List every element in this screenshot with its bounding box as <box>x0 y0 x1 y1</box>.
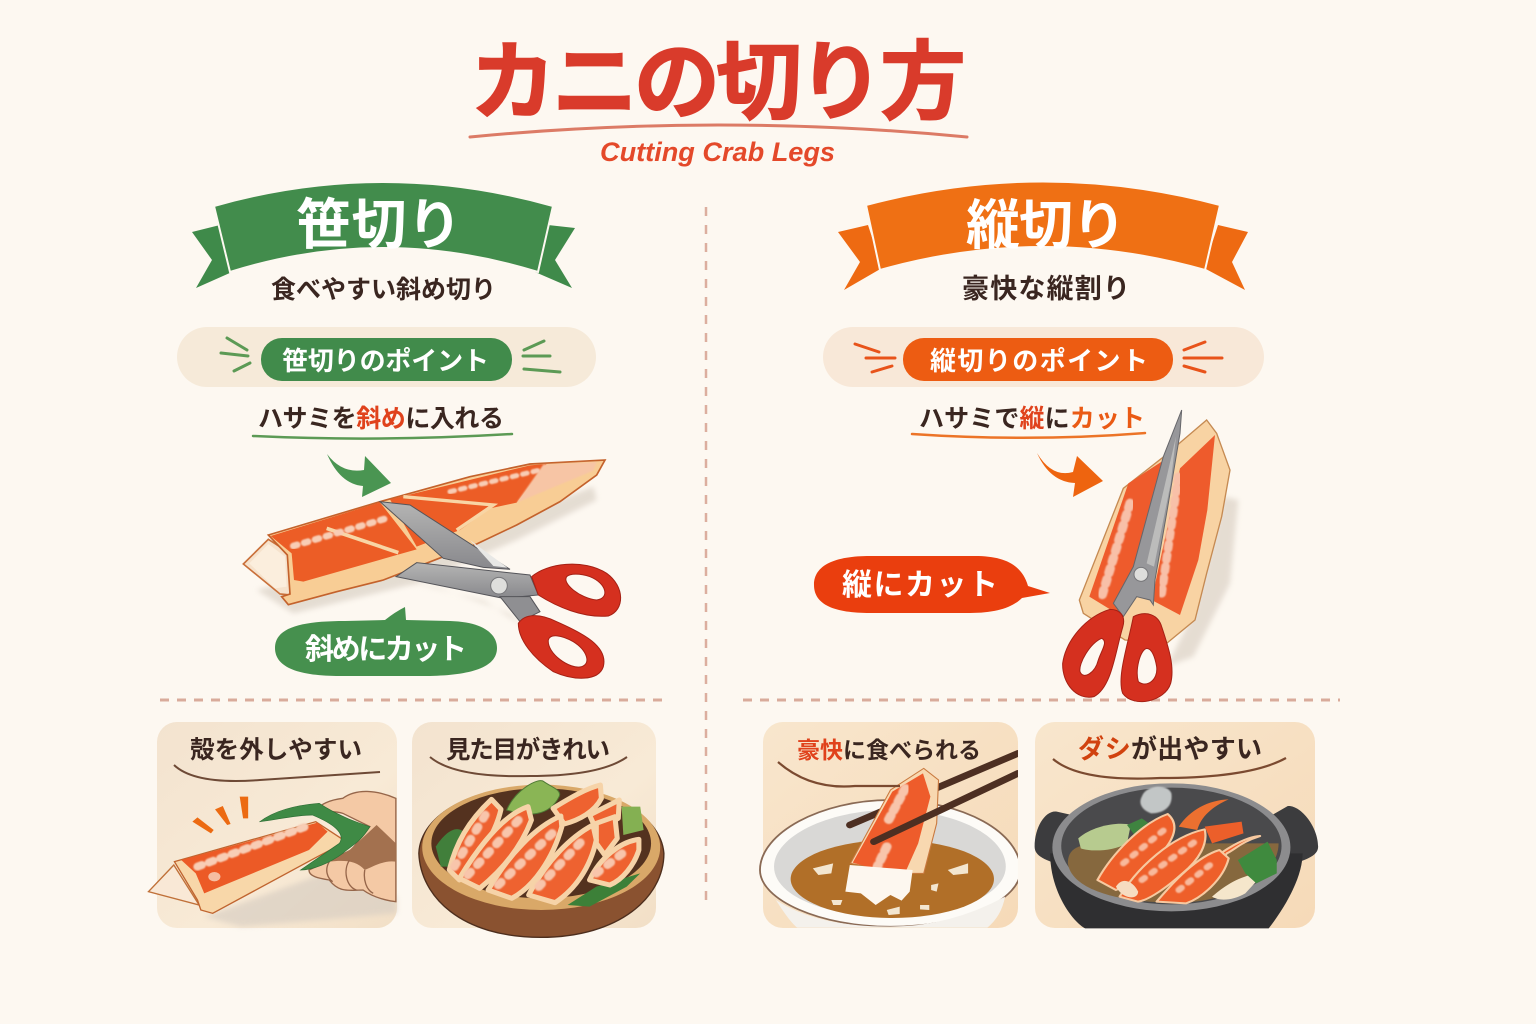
card: beautiful looks <box>412 722 664 937</box>
points pill: tate-giri <box>823 327 1264 387</box>
illustration: vertical cut crab leg with scissors <box>1063 410 1238 702</box>
card heading: 豪快に食べられる <box>797 737 981 763</box>
instruction: vertical cut: ハサミで縦にカット <box>919 405 1145 433</box>
callout: vertical cut <box>814 556 1050 613</box>
card: eat heartily <box>760 722 1021 928</box>
card: dashi comes out <box>1035 722 1318 930</box>
banner: tate-giri: 縦切り <box>966 196 1126 256</box>
arrow: green <box>327 454 391 497</box>
illustration: diagonal cut crab leg with scissors <box>243 460 621 678</box>
card heading: ダシが出やすい <box>1078 734 1262 764</box>
illustration: cracking shell by hand <box>148 791 397 927</box>
callout: diagonal cut: 斜めにカット <box>305 633 467 666</box>
instruction: diagonal scissors: ハサミを斜めに入れる <box>258 405 504 433</box>
card heading: 見た目がきれい <box>446 735 610 764</box>
points pill: sasa-giri <box>177 327 596 387</box>
illustration: earthen pot with crab <box>1035 783 1318 930</box>
callout: vertical cut: 縦にカット <box>842 569 998 602</box>
banner: tate-giri <box>838 182 1248 290</box>
banner: sasa-giri <box>192 182 575 288</box>
card heading: 殻を外しやすい <box>190 736 362 764</box>
arrow: orange <box>1037 453 1103 497</box>
title: Cutting Crab Legs <box>600 137 835 167</box>
subtitle: tate-giri: 豪快な縦割り <box>962 274 1130 304</box>
banner: sasa-giri: 笹切り <box>296 194 462 256</box>
illustration: crab in wooden bowl <box>419 781 664 937</box>
callout: diagonal cut <box>275 607 497 676</box>
title: カニの切り方 <box>470 35 966 131</box>
subtitle: sasa-giri: 食べやすい斜め切り <box>271 276 496 304</box>
points pill: tate-giri: 縦切りのポイント <box>930 346 1148 376</box>
illustration: crab with chopsticks in soup bowl <box>760 753 1021 928</box>
card: easy to remove shell <box>148 722 397 928</box>
points pill: sasa-giri: 笹切りのポイント <box>282 346 489 376</box>
